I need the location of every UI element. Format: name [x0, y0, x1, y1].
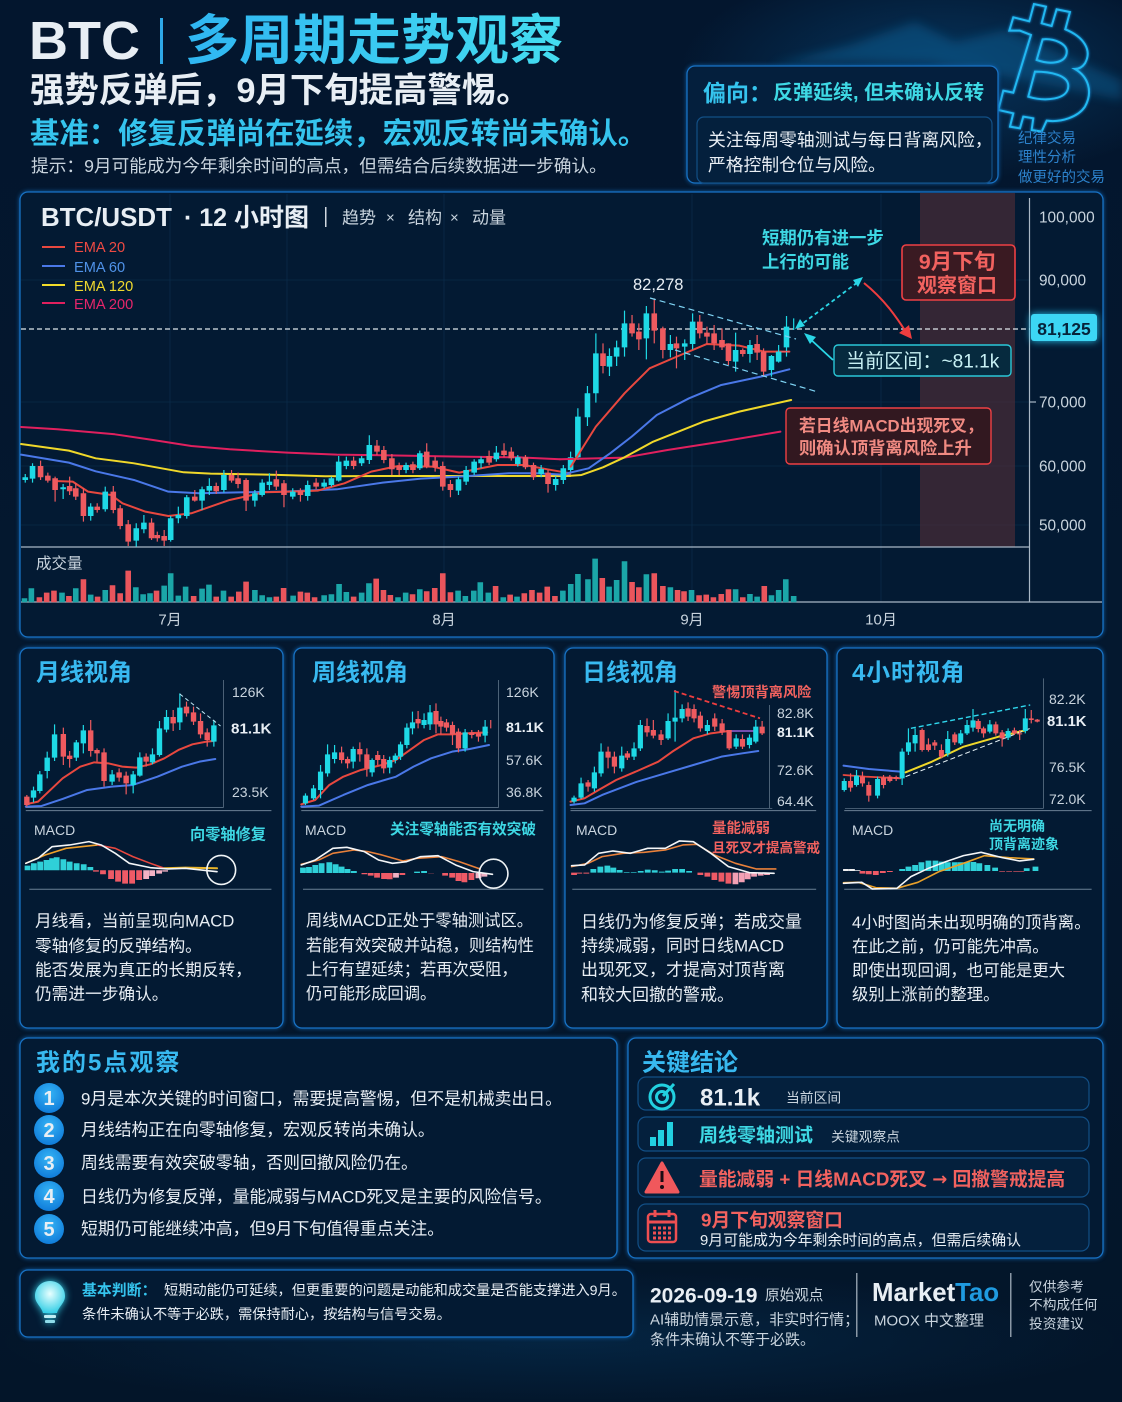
panel: bias: [687, 66, 998, 183]
current price tag: 81,125: [1037, 319, 1091, 339]
panel: weekly view: [294, 648, 554, 1028]
panel: daily view: 且死叉才提高警戒: [712, 839, 820, 855]
icon: target: [650, 1084, 674, 1109]
candles left part: [21, 333, 596, 602]
footer: brand: MarketTao: [872, 1279, 999, 1307]
panel: 4-hour view: 4小时图尚未出现明确的顶背离。: [852, 914, 1091, 932]
panel: basic judgment: 条件未确认不等于必跌，需保持耐心，按结构与信号交易。: [82, 1306, 451, 1323]
panel: monthly view: 81.1K: [231, 720, 272, 737]
footer: brand: MOOX 中文整理: [874, 1312, 984, 1329]
item 5: 短期仍可能继续冲高，但9月下旬值得重点关注。: [81, 1219, 444, 1238]
item 3: 3: [43, 1153, 55, 1175]
callout: current range: 当前区间：~81.1k: [846, 350, 1000, 372]
panel: 4-hour view: 4小时视角: [852, 659, 965, 686]
subtitle: 强势反弹后，9月下旬提高警惕。: [30, 72, 531, 110]
chart heading: ×: [450, 209, 459, 226]
item 5: [34, 1214, 444, 1244]
panel: daily view: 81.1K: [777, 724, 814, 740]
footer: date and note: [650, 1284, 859, 1348]
callout: september window: 9月下旬: [919, 250, 995, 274]
panel: 4-hour view: 即使出现回调，也可能是更大: [852, 962, 1065, 980]
panel: 4-hour view: MACD: [852, 822, 893, 838]
panel: daily view: 日线仍为修复反弹；若成交量: [581, 912, 802, 931]
panel: weekly view: 关注零轴能否有效突破: [390, 820, 536, 838]
price axis labels: 90,000: [1039, 272, 1086, 289]
footer: date and note: AI辅助情景示意，非实时行情；: [650, 1310, 859, 1328]
panel: 4-hour view: 76.5K: [1049, 759, 1086, 775]
row: current range: [638, 1077, 1089, 1111]
icon: warning: [646, 1163, 678, 1192]
panel: 4-hour view: 在此之前，仍可能先冲高。: [852, 938, 1049, 956]
panel: daily view: 64.4K: [777, 793, 814, 809]
row: window: [638, 1204, 1089, 1251]
item 2: 2: [43, 1120, 55, 1142]
price axis labels: [1039, 209, 1095, 534]
panel: weekly view: 上行有望延续；若再次受阻，: [306, 961, 518, 979]
panel: monthly view: MACD: [34, 822, 75, 838]
month axis labels: 9月: [680, 611, 704, 628]
panel: bias: 严格控制仓位与风险。: [708, 155, 886, 175]
panel: five observations: 我的5点观察: [36, 1049, 181, 1076]
icon: neon bitcoin logo: [998, 4, 1089, 132]
panel: daily view: [565, 648, 827, 1028]
callout: current range: [804, 333, 1011, 376]
slogan: 做更好的交易: [1018, 168, 1105, 186]
footer: disclaimer: [1029, 1278, 1098, 1331]
title: 多周期走势观察: [185, 11, 563, 71]
icon: bars: [650, 1122, 673, 1146]
row: weekly zero axis: 周线零轴测试: [699, 1124, 813, 1146]
panel: daily view: 72.6K: [777, 762, 814, 778]
month axis labels: 7月: [158, 611, 182, 628]
item 5: 5: [43, 1219, 55, 1241]
icon: calendar: [648, 1210, 676, 1242]
footer: date and note: 原始观点: [765, 1287, 823, 1304]
legend: EMA: EMA 120: [74, 279, 133, 295]
row: current range: 81.1k: [700, 1084, 761, 1111]
title: BTC: [29, 11, 140, 71]
legend: EMA: EMA 20: [74, 240, 125, 256]
peak label: 82,278: [633, 276, 683, 294]
item 4: 4: [43, 1186, 55, 1208]
icon: light bulb: [35, 1281, 65, 1323]
panel: monthly view: 向零轴修复: [190, 825, 266, 843]
panel: 4-hour view: 72.0K: [1049, 791, 1086, 807]
footer: date and note: 条件未确认不等于必跌。: [650, 1330, 815, 1348]
row: window: 9月可能成为今年剩余时间的高点，但需后续确认: [700, 1231, 1021, 1249]
panel: key conclusions: 关键结论: [642, 1049, 738, 1076]
slogan: 理性分析: [1018, 149, 1076, 166]
callout: macd risk: [786, 408, 991, 464]
panel: daily view: 警惕顶背离风险: [712, 684, 812, 701]
footer: brand: [872, 1279, 999, 1329]
panel: monthly view: 月线看，当前呈现向MACD: [35, 911, 234, 930]
panel: 4-hour view: 尚无明确: [989, 818, 1045, 834]
item 3: [34, 1148, 418, 1178]
volume bars right: [563, 559, 794, 602]
volume bars left: [24, 573, 517, 602]
hint text: 提示：9月可能成为今年剩余时间的高点，但需结合后续数据进一步确认。: [31, 156, 607, 176]
chart heading: 结构: [408, 208, 442, 227]
chart heading: ×: [386, 209, 395, 226]
chart heading: 动量: [472, 208, 506, 227]
panel: bias: 关注每周零轴测试与每日背离风险，: [708, 130, 993, 150]
panel: weekly view: 仍可能形成回调。: [306, 985, 436, 1003]
callout: september window: 观察窗口: [917, 274, 997, 297]
panel: weekly view: 36.8K: [506, 784, 543, 800]
panel: bias: 反弹延续, 但未确认反转: [773, 81, 984, 104]
panel: monthly view: [20, 648, 283, 1028]
panel: daily view: 日线视角: [582, 659, 678, 686]
panel: 4-hour view: 82.2K: [1049, 691, 1086, 707]
panel: key conclusions: [628, 1038, 1103, 1258]
panel: five observations: [20, 1038, 617, 1258]
callout: upside: [762, 228, 884, 272]
legend: EMA: [42, 240, 133, 313]
panel: weekly view: 57.6K: [506, 752, 543, 768]
slogan: 纪律交易: [1018, 129, 1076, 147]
panel: weekly view: 周线MACD正处于零轴测试区。: [306, 912, 533, 930]
footer: disclaimer: 投资建议: [1029, 1316, 1084, 1331]
panel: weekly view: MACD: [305, 822, 346, 838]
row: current range: 当前区间: [786, 1089, 841, 1105]
item 2: [34, 1115, 435, 1145]
price axis labels: 70,000: [1039, 394, 1086, 411]
item 3: 周线需要有效突破零轴，否则回撤风险仍在。: [81, 1153, 418, 1172]
item 1: [34, 1083, 562, 1113]
price axis labels: 60,000: [1039, 458, 1086, 475]
panel: daily view: 持续减弱，同时日线MACD: [581, 936, 784, 955]
footer: disclaimer: 仅供参考: [1029, 1278, 1084, 1294]
price axis labels: 100,000: [1039, 209, 1095, 226]
observation window band: [920, 193, 1015, 547]
callout: upside: 上行的可能: [762, 252, 849, 272]
baseline statement: 基准：修复反弹尚在延续，宏观反转尚未确认。: [30, 117, 647, 150]
slogan: [1018, 129, 1105, 186]
legend: EMA: EMA 200: [74, 297, 133, 313]
panel: bias: 偏向：: [703, 80, 772, 106]
panel: weekly view: 周线视角: [312, 659, 408, 686]
footer: disclaimer: 不构成任何: [1029, 1297, 1098, 1312]
volume label: 成交量: [36, 554, 83, 572]
month axis labels: 10月: [865, 611, 897, 628]
panel: basic judgment: 短期动能仍可延续，但更重要的问题是动能和成交量是否能支撑进入9月。: [164, 1282, 626, 1299]
item 4: 日线仍为修复反弹，量能减弱与MACD死叉是主要的风险信号。: [81, 1187, 552, 1206]
current price dashed line: [21, 328, 1030, 330]
panel: weekly view: 若能有效突破并站稳，则结构性: [306, 937, 534, 955]
panel: daily view: 出现死叉，才提高对顶背离: [581, 960, 785, 979]
panel: monthly view: 126K: [232, 684, 265, 700]
panel: main 12h chart: [20, 192, 1103, 637]
chart heading: · 12 小时图: [184, 204, 309, 232]
panel: 4-hour view: 顶背离迹象: [989, 836, 1059, 852]
callout: macd risk: 则确认顶背离风险上升: [799, 438, 972, 458]
arrow: red down curve: [864, 283, 912, 339]
price axis labels: 50,000: [1039, 517, 1086, 534]
item 1: 1: [43, 1088, 55, 1110]
panel: monthly view: 月线视角: [36, 659, 132, 686]
row: weekly zero axis: [638, 1117, 1089, 1151]
callout: macd risk: 若日线MACD出现死叉，: [799, 415, 984, 435]
footer: date and note: 2026-09-19: [650, 1284, 757, 1307]
panel: monthly view: 仍需进一步确认。: [35, 984, 168, 1003]
callout: september window: [902, 245, 1015, 300]
panel: 4-hour view: [837, 648, 1103, 1028]
row: weekly zero axis: 关键观察点: [831, 1128, 900, 1144]
arrow: upside dashed: [795, 277, 863, 329]
month axis labels: 8月: [432, 611, 456, 628]
panel: daily view: MACD: [576, 822, 617, 838]
axes: [21, 198, 1102, 602]
row: window: 9月下旬观察窗口: [701, 1209, 843, 1230]
chart heading: 趋势: [342, 208, 376, 227]
panel: weekly view: 81.1K: [506, 720, 545, 736]
panel: monthly view: 23.5K: [232, 784, 269, 800]
legend: EMA: EMA 60: [74, 260, 125, 276]
panel: basic judgment: 基本判断：: [82, 1281, 156, 1299]
current price tag: [1031, 314, 1097, 341]
panel: monthly view: 能否发展为真正的长期反转，: [35, 960, 252, 979]
panel: daily view: 和较大回撤的警戒。: [581, 985, 734, 1004]
pattern trend lines: [650, 298, 818, 392]
chart heading: BTC/USDT: [41, 204, 172, 232]
chart heading: [41, 204, 506, 232]
panel: monthly view: 零轴修复的反弹结构。: [35, 936, 202, 955]
callout: upside: 短期仍有进一步: [762, 228, 884, 248]
panel: daily view: 量能减弱: [712, 819, 770, 837]
panel: daily view: 82.8K: [777, 705, 814, 721]
candles right part: [560, 298, 794, 602]
month axis labels: [158, 611, 897, 628]
panel: 4-hour view: 级别上涨前的整理。: [852, 986, 1000, 1004]
panel: 4-hour view: 81.1K: [1047, 714, 1087, 730]
item 1: 9月是本次关键的时间窗口，需要提高警惕，但不是机械卖出日。: [81, 1089, 562, 1108]
row: risk: 量能减弱 + 日线MACD死叉 → 回撤警戒提高: [699, 1167, 1065, 1189]
item 2: 月线结构正在向零轴修复，宏观反转尚未确认。: [81, 1120, 435, 1139]
row: risk: [638, 1158, 1089, 1197]
item 4: [34, 1181, 552, 1211]
panel: basic judgment: [20, 1270, 633, 1337]
panel: weekly view: 126K: [506, 684, 539, 700]
